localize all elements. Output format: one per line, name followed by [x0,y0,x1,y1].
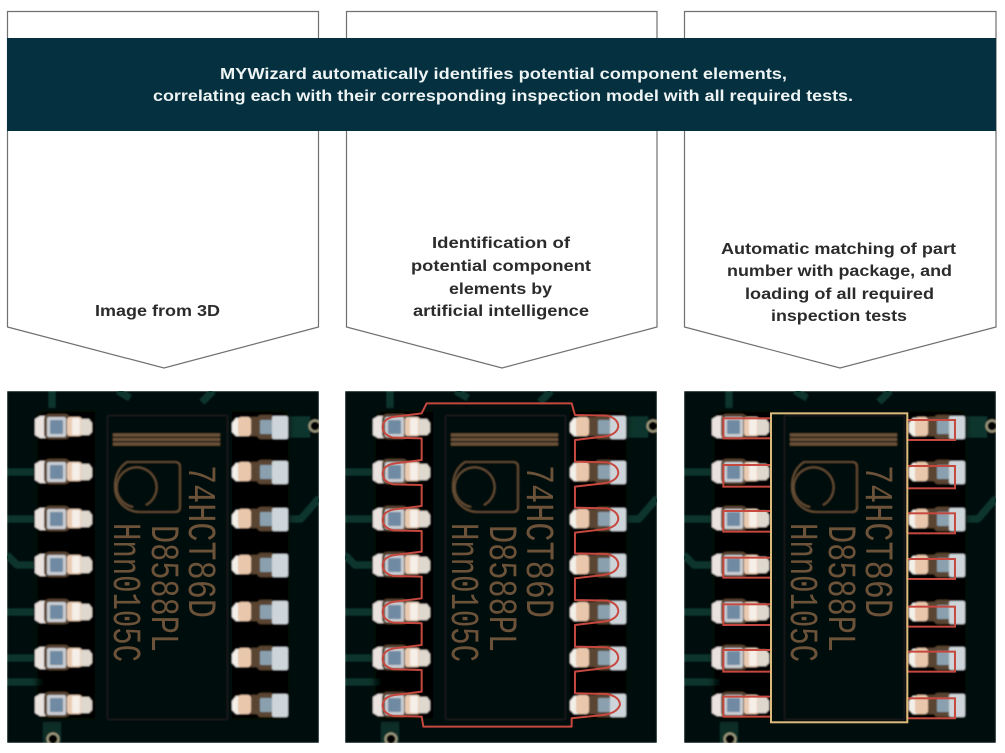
chip markings: Hnn0105C [439,523,484,662]
yellow package outline [771,413,907,722]
chip markings [114,468,216,661]
label: identification by artificial intelligence: potential component [411,258,592,275]
chip markings [790,468,893,661]
banner text: correlating each with their corresponding inspection model with all required tests. [153,88,853,105]
chip markings: D8588PL [139,525,184,652]
chip markings: Hnn0105C [101,523,146,662]
label: automatic matching: Automatic matching of part [721,241,957,258]
photo: chip image from 3D [7,391,322,746]
label: identification by artificial intelligence: artificial intelligence [413,303,589,320]
panel: image from 3D callout [8,12,318,368]
chip markings: D8588PL [816,525,861,652]
label: automatic matching: number with package, and [727,263,952,280]
label: identification by artificial intelligence: elements by [449,281,552,298]
photo: chip with AI contours [345,391,660,746]
banner [7,38,996,131]
chip markings: Hnn0105C [778,523,823,662]
red identified contour [383,403,620,727]
label: automatic matching [721,241,957,325]
chip markings: 74HCT86D [176,465,221,618]
label: image from 3D: Image from 3D [95,303,220,320]
panel: automatic matching callout [684,12,996,368]
photo: chip with matched package [684,391,998,746]
panel: identification callout [346,12,657,368]
chip markings: 74HCT86D [853,465,898,618]
banner text: MYWizard automatically identifies potential component elements, [220,66,787,83]
chip markings [452,468,554,661]
label: automatic matching: loading of all required [745,286,934,303]
label: identification by artificial intelligence [411,235,592,320]
red lead boxes [723,418,955,718]
label: identification by artificial intelligence: Identification of [432,235,571,252]
chip markings: D8588PL [477,525,522,652]
label: automatic matching: inspection tests [771,308,907,325]
banner text [153,66,853,105]
chip markings: 74HCT86D [514,465,559,618]
